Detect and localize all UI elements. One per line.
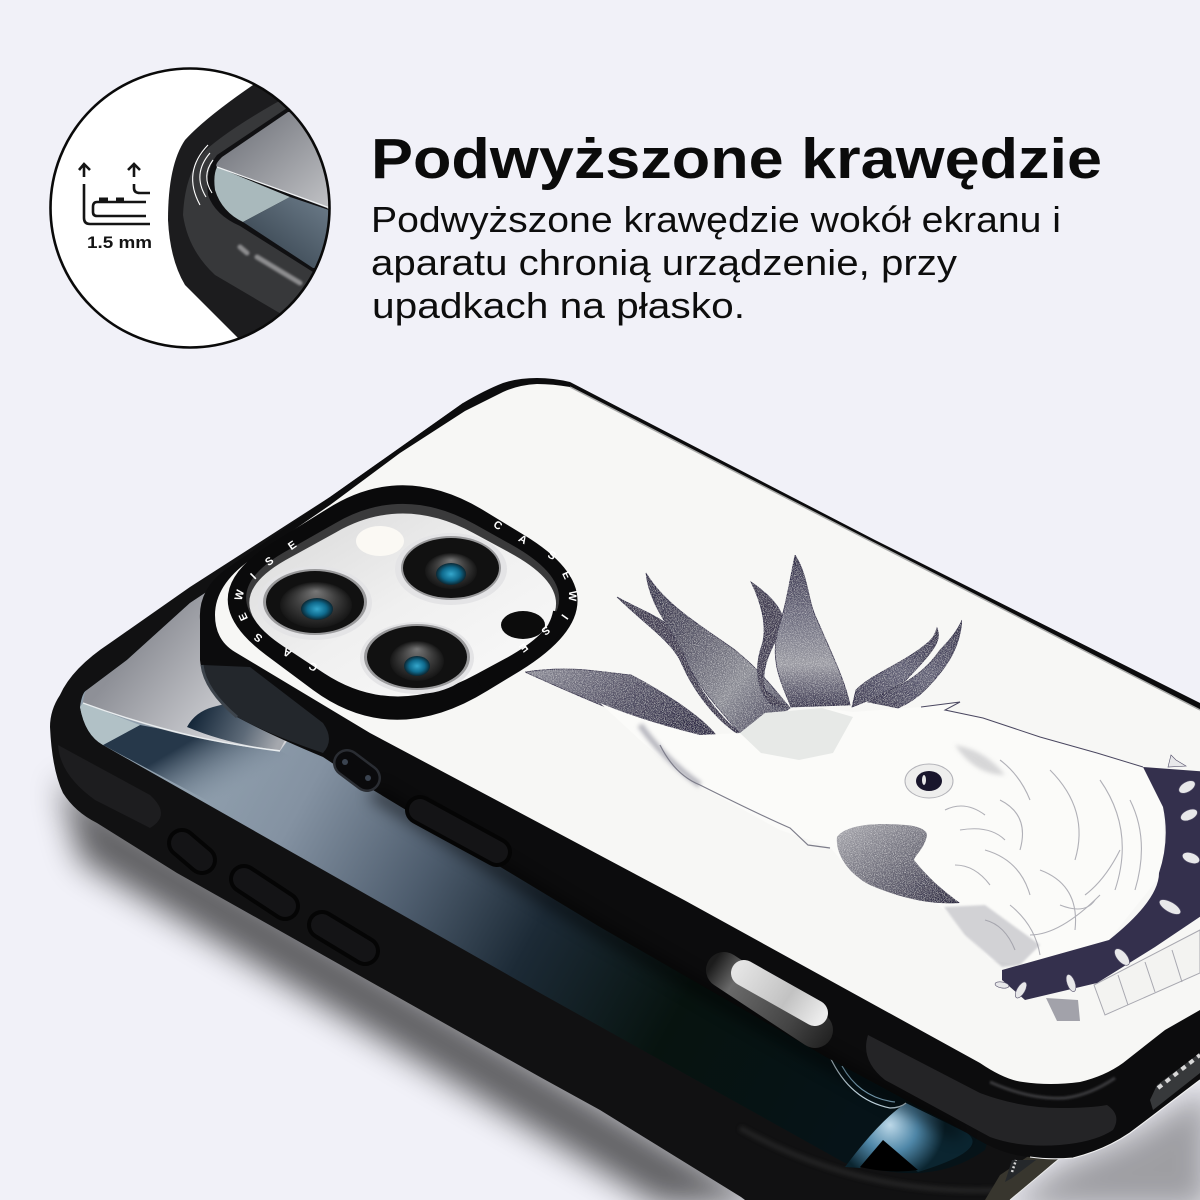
sensor hole (501, 611, 545, 639)
inset bumper highlights (240, 247, 300, 283)
bumper corner pad (58, 745, 161, 828)
ring lettering CASEWISE: I (248, 571, 259, 582)
ring lettering CASEWISE: W (233, 588, 247, 602)
bumper bottom white edge (1030, 1080, 1200, 1159)
inset screen gray (216, 112, 328, 210)
side button: volume down (322, 925, 365, 951)
inset background (50, 68, 330, 348)
inset highlight line (217, 167, 330, 208)
description (371, 199, 1061, 326)
bumper pad: camera side (203, 665, 329, 753)
description: aparatu chronią urządzenie, przy (371, 242, 957, 283)
heading: Podwyższone krawędzie (371, 127, 1102, 191)
head outline (921, 702, 1143, 767)
ring lettering CASEWISE: S (252, 630, 265, 644)
ring lettering CASEWISE: S (539, 623, 552, 637)
ring inner wall (246, 504, 559, 696)
bumper pad: bottom corner (866, 1035, 1116, 1146)
lower phone bumper (50, 403, 1100, 1200)
inset border (50, 68, 330, 348)
shadow on screen (373, 792, 960, 1133)
neck feathers below collar (1046, 930, 1200, 1021)
ring redraw on sensor side (480, 612, 560, 685)
silver edge highlight (570, 387, 1200, 710)
screen wallpaper: dark wedge (187, 700, 290, 750)
speaker grill (1150, 1053, 1200, 1110)
ring lettering CASEWISE: E (559, 570, 573, 581)
icon label: 1.5 mm (87, 233, 152, 252)
charging port (724, 970, 815, 1030)
inset white arcs (193, 145, 213, 205)
eye (905, 764, 953, 798)
camera island (228, 485, 578, 720)
case bumper (200, 378, 1200, 1159)
side button: volume up (244, 879, 285, 906)
lens: left (258, 566, 372, 640)
inset screen pale wedge (214, 167, 290, 222)
illustration: cockatoo with spiked collar (525, 555, 1200, 1021)
side button: power (420, 810, 497, 852)
head and crest body (600, 703, 786, 742)
description: upadkach na płasko. (372, 285, 745, 326)
crest underside line (660, 745, 830, 848)
flash (356, 526, 404, 556)
screen wallpaper: pale wedge (80, 703, 140, 745)
screen wallpaper: slate shade under line (103, 725, 373, 850)
upper phone: case back (200, 378, 1200, 1159)
lower phone corner edge (985, 1155, 1058, 1200)
ring lettering CASEWISE: E (237, 611, 251, 622)
raised edge icon (79, 164, 150, 224)
ring lettering CASEWISE: S (545, 549, 558, 563)
description: Podwyższone krawędzie wokół ekranu i (371, 199, 1061, 240)
lower phone screen (80, 490, 1000, 1173)
microphone slot (342, 759, 371, 781)
camera ring (228, 485, 578, 720)
ring lettering CASEWISE (233, 519, 578, 673)
screen wallpaper: gray area (83, 490, 360, 751)
white back panel (215, 384, 1200, 1084)
ring lettering CASEWISE: E (517, 640, 530, 654)
lower phone: front with screen (50, 403, 1100, 1200)
lens: bottom (360, 622, 474, 694)
crest underside shading (640, 725, 700, 785)
neck shading (944, 905, 1040, 967)
ring lettering CASEWISE: E (286, 539, 299, 553)
pale crest blob (740, 708, 853, 760)
bumper sheen (740, 1128, 1000, 1190)
beak (837, 824, 960, 903)
cheek shading (955, 745, 1005, 775)
body feather lines (945, 760, 1141, 955)
ring lettering CASEWISE: A (281, 645, 294, 659)
lens plate (249, 514, 556, 696)
ring lettering CASEWISE: I (558, 612, 570, 621)
ring lettering CASEWISE: C (491, 519, 504, 533)
crest feathers (525, 555, 962, 742)
spiked collar (1002, 767, 1200, 1000)
ring lettering CASEWISE: C (307, 659, 320, 673)
inset circle: raised edge close-up (50, 68, 340, 348)
collar spikes (995, 755, 1200, 1000)
lens: top right (395, 533, 507, 605)
inset case corner (168, 85, 340, 340)
ring lettering CASEWISE: W (566, 591, 578, 602)
inset screen dark (243, 197, 335, 268)
screen wallpaper: blue glow lines (830, 1057, 973, 1172)
bumper ridge sheen (990, 1078, 1115, 1098)
side button: small (182, 843, 202, 860)
screen wallpaper: highlight line (83, 703, 280, 751)
phone shadow (60, 780, 1200, 1200)
ring lettering CASEWISE: A (516, 533, 529, 547)
ring lettering CASEWISE: S (263, 555, 276, 569)
bumper pad: left edge highlight (202, 665, 237, 717)
